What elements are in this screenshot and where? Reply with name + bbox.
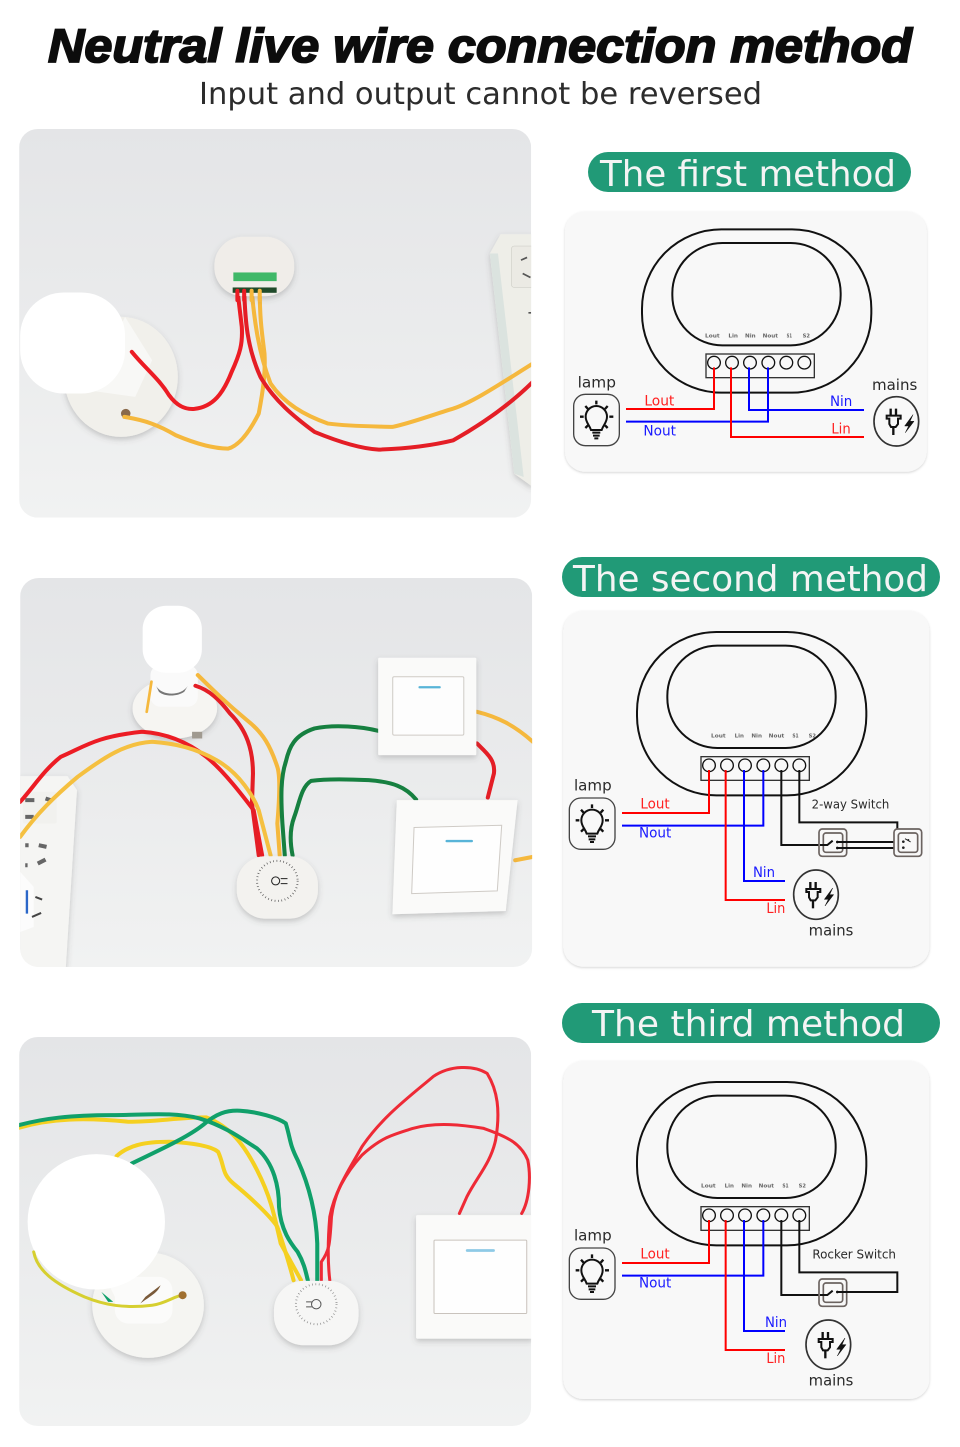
mains label: mains bbox=[872, 376, 918, 394]
mains label: mains bbox=[809, 1371, 854, 1389]
icon: lamp bbox=[569, 798, 615, 849]
terminal block bbox=[706, 354, 814, 378]
wire labels: Lin bbox=[766, 1351, 785, 1367]
photo: second method wiring bbox=[20, 578, 533, 967]
terminal block bbox=[701, 757, 809, 780]
module bbox=[274, 1281, 359, 1345]
wire labels: Lout bbox=[640, 1246, 670, 1262]
icon: rocker switch bbox=[799, 1220, 897, 1306]
wires bbox=[19, 1117, 301, 1280]
wire labels: Nin bbox=[753, 865, 775, 881]
wire labels: Lout bbox=[640, 796, 670, 812]
terminal labels: Nout bbox=[759, 1183, 774, 1189]
bulb bbox=[20, 292, 125, 394]
panel: first method diagram bbox=[565, 212, 927, 472]
icon: mains plug bbox=[874, 397, 919, 446]
switch label: Rocker Switch bbox=[812, 1247, 896, 1261]
icon: mains plug bbox=[794, 870, 838, 919]
terminal labels bbox=[705, 334, 810, 340]
terminal labels: Lin bbox=[735, 733, 744, 739]
wire labels: Lout bbox=[644, 394, 675, 410]
lamp label: lamp bbox=[578, 374, 616, 392]
terminal block bbox=[701, 1207, 809, 1230]
power strip bbox=[20, 776, 77, 967]
switch lower bbox=[392, 800, 518, 914]
device outline bbox=[637, 1082, 866, 1245]
wire labels: Nout bbox=[643, 423, 676, 439]
terminal labels: Nin bbox=[751, 733, 762, 739]
device outline bbox=[642, 229, 871, 393]
icon: lamp bbox=[574, 394, 619, 446]
mains label: mains bbox=[809, 921, 854, 939]
wires bbox=[622, 1220, 820, 1350]
heading pill: first method: The first method bbox=[599, 154, 896, 195]
terminal labels: S2 bbox=[809, 733, 816, 739]
wire labels: Nout bbox=[639, 1276, 672, 1292]
module bbox=[214, 237, 294, 296]
icon: lamp bbox=[569, 1248, 615, 1299]
terminal labels: Lout bbox=[701, 1183, 716, 1189]
lamp base bbox=[92, 1253, 204, 1358]
terminal labels: S1 bbox=[782, 1183, 789, 1189]
icon: mains plug bbox=[806, 1320, 851, 1369]
terminal labels: Lout bbox=[705, 334, 720, 340]
terminal labels: S2 bbox=[803, 334, 810, 340]
wire labels bbox=[639, 1246, 787, 1367]
switch label: 2-way Switch bbox=[812, 797, 889, 811]
wires bbox=[20, 732, 262, 855]
power strip bbox=[490, 234, 533, 487]
terminal labels: Lin bbox=[725, 1183, 734, 1189]
wires bbox=[622, 770, 897, 900]
lamp base bbox=[64, 317, 178, 437]
lamp label: lamp bbox=[574, 777, 612, 795]
switch bbox=[416, 1215, 533, 1339]
switch upper bbox=[378, 658, 476, 755]
terminal labels bbox=[701, 1183, 806, 1189]
terminal labels: Nout bbox=[769, 733, 785, 739]
photo: third method wiring bbox=[19, 1037, 533, 1426]
subtitle: Input and output cannot be reversed bbox=[199, 77, 762, 112]
module bbox=[237, 856, 318, 919]
terminal labels bbox=[711, 733, 816, 739]
photo: first method wiring bbox=[19, 129, 535, 518]
terminal labels: Lout bbox=[711, 733, 726, 739]
wire labels bbox=[643, 394, 852, 439]
heading pill: third method: The third method bbox=[591, 1004, 905, 1045]
wire labels: Nin bbox=[765, 1315, 787, 1331]
wire labels bbox=[639, 796, 785, 917]
wires bbox=[132, 290, 242, 409]
terminal labels: Nin bbox=[741, 1183, 752, 1189]
lamp bbox=[133, 678, 217, 738]
lamp label: lamp bbox=[574, 1227, 612, 1245]
terminal labels: Nin bbox=[745, 334, 756, 340]
icon: 2-way switch one bbox=[819, 829, 894, 856]
panel: third method diagram bbox=[563, 1061, 929, 1399]
wire labels: Lin bbox=[831, 421, 851, 437]
terminal labels: S1 bbox=[792, 733, 799, 739]
title: Neutral live wire connection method bbox=[48, 19, 913, 72]
device outline bbox=[637, 632, 866, 795]
wires bbox=[626, 367, 864, 437]
terminal labels: Nout bbox=[763, 334, 778, 340]
terminal labels: S1 bbox=[787, 334, 792, 340]
wire labels: Lin bbox=[766, 901, 785, 917]
wire labels: Nout bbox=[639, 826, 672, 842]
wire labels: Nin bbox=[830, 394, 852, 410]
icon: 2-way switch two bbox=[894, 829, 922, 856]
terminal labels: S2 bbox=[799, 1183, 806, 1189]
panel: second method diagram bbox=[563, 611, 929, 967]
bulb bbox=[108, 1284, 169, 1317]
terminal labels: Lin bbox=[728, 334, 738, 340]
heading pill: second method: The second method bbox=[572, 559, 928, 600]
